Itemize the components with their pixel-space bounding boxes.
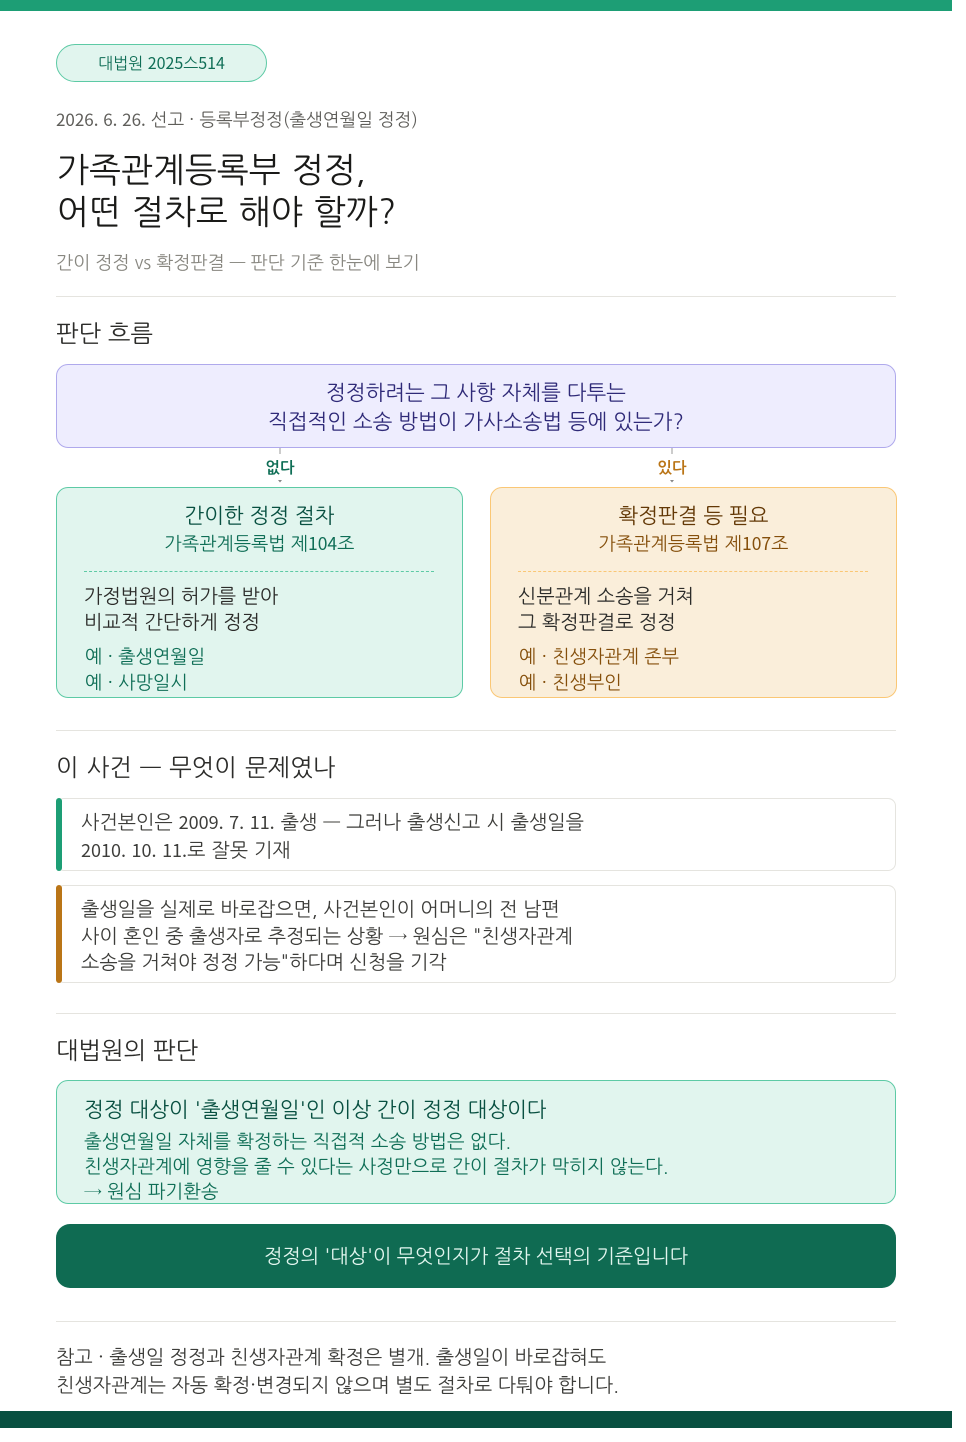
description: 가정법원의 허가를 받아 (84, 586, 278, 606)
arrow: no branch (278, 448, 282, 482)
case fact 2 (56, 885, 896, 983)
accent bar amber (56, 885, 62, 983)
examples: 예 · 친생부인 (519, 672, 622, 692)
panel heading: final judgment: 확정판결 등 필요 (619, 506, 768, 527)
fact text 2: 출생일을 실제로 바로잡으면, 사건본인이 어머니의 전 남편 (81, 899, 560, 919)
accent bar green (56, 798, 62, 871)
statute: article 107: 가족관계등록법 제107조 (599, 531, 788, 556)
title: 어떤 절차로 해야 할까? (57, 195, 396, 229)
fact text 2: 소송을 거쳐야 정정 가능"하다며 신청을 기각 (81, 952, 447, 972)
panel: final judgment needed (490, 487, 896, 698)
description: 비교적 간단하게 정정 (84, 612, 260, 632)
description (84, 586, 278, 632)
examples: 예 · 친생자관계 존부 (519, 647, 679, 666)
date and case type: 2026. 6. 26. 선고 · 등록부정정(출생연월일 정정) (56, 106, 418, 131)
ruling headline: 정정 대상이 '출생연월일'인 이상 간이 정정 대상이다 (84, 1100, 547, 1121)
footnote: 친생자관계는 자동 확정·변경되지 않으며 별도 절차로 다퉈야 합니다. (56, 1375, 619, 1395)
panel: ruling (56, 1080, 896, 1204)
conclusion banner: 정정의 '대상'이 무엇인지가 절차 선택의 기준입니다 (264, 1246, 688, 1266)
label: yes: 있다 (657, 461, 687, 476)
ruling detail: 출생연월일 자체를 확정하는 직접적 소송 방법은 없다. (84, 1132, 511, 1151)
examples (85, 647, 205, 692)
description: 그 확정판결로 정정 (518, 612, 676, 632)
fact text 1: 2010. 10. 11.로 잘못 기재 (81, 837, 291, 863)
panel heading: simple correction: 간이한 정정 절차 (185, 506, 334, 527)
fact text 2 (81, 899, 573, 972)
footnote (56, 1347, 619, 1395)
conclusion banner (56, 1224, 896, 1288)
label: no: 없다 (265, 461, 295, 476)
footnote: 참고 · 출생일 정정과 친생자관계 확정은 별개. 출생일이 바로잡혀도 (56, 1347, 606, 1367)
examples: 예 · 사망일시 (85, 672, 188, 692)
case number badge: 대법원 2025스514 (98, 50, 225, 74)
case number badge (56, 44, 267, 82)
fact text 1 (81, 809, 584, 863)
question box: 정정하려는 그 사항 자체를 다투는 (326, 383, 626, 404)
ruling detail (84, 1132, 669, 1201)
bottom bar (0, 1411, 952, 1428)
fact text 2: 사이 혼인 중 출생자로 추정되는 상황 → 원심은 "친생자관계 (81, 926, 573, 946)
panel: simple correction (56, 487, 462, 698)
ruling detail: 친생자관계에 영향을 줄 수 있다는 사정만으로 간이 절차가 막히지 않는다. (84, 1157, 669, 1176)
fact text 1: 사건본인은 2009. 7. 11. 출생 — 그러나 출생신고 시 출생일을 (81, 809, 584, 835)
description (518, 586, 694, 632)
description: 신분관계 소송을 거쳐 (518, 586, 694, 606)
title (57, 153, 396, 229)
question box: 직접적인 소송 방법이 가사소송법 등에 있는가? (268, 412, 684, 433)
examples: 예 · 출생연월일 (85, 647, 205, 666)
statute: article 104: 가족관계등록법 제104조 (165, 531, 354, 556)
heading: what was at issue: 이 사건 — 무엇이 문제였나 (56, 756, 335, 780)
case fact 1 (56, 798, 896, 871)
heading: decision flow: 판단 흐름 (56, 322, 153, 346)
arrow: yes branch (670, 448, 674, 482)
top bar (0, 0, 952, 11)
heading: supreme court ruling: 대법원의 판단 (56, 1039, 198, 1063)
subtitle: 간이 정정 vs 확정판결 — 판단 기준 한눈에 보기 (56, 253, 420, 272)
examples (519, 647, 679, 692)
ruling detail: → 원심 파기환송 (84, 1182, 219, 1201)
question box (56, 364, 896, 448)
title: 가족관계등록부 정정, (57, 153, 366, 187)
